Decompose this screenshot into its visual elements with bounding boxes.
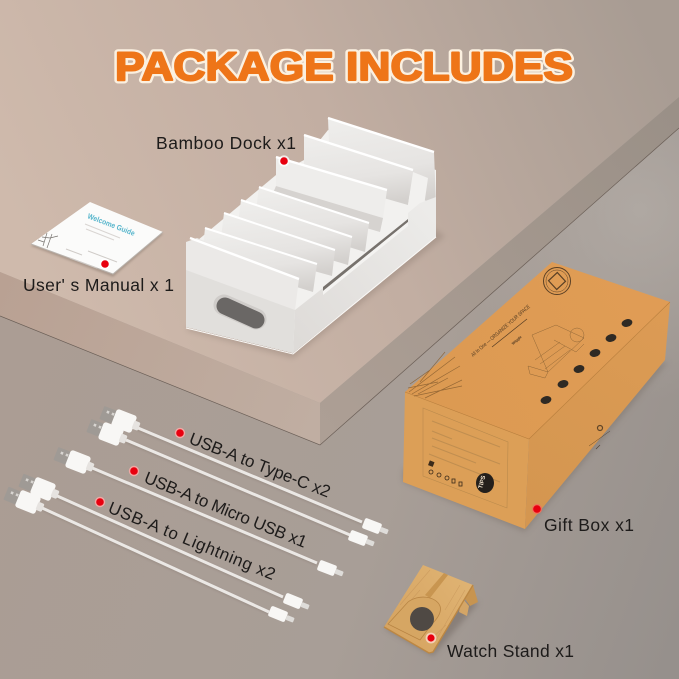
box dock line drawing [528,325,584,378]
box tips badge [476,473,494,493]
box slogan: All In One — ORGANIZE YOUR SPACE [470,304,532,359]
box slogan [470,304,532,359]
USB-A to Type-C cable 2 [86,417,376,549]
box feature icons [540,318,633,405]
stand recess [388,597,441,640]
manual heading: Welcome Guide [86,211,136,238]
markers: red dots [95,155,542,643]
USB-A to Micro USB cable [53,445,345,579]
box side brand mark [589,426,610,449]
title: PACKAGE INCLUDES [115,45,573,89]
panel: platform [0,0,679,445]
dock slat 7 [304,135,413,205]
dock side wall [293,197,436,353]
manual bamboo sketch [38,233,58,248]
dock slat 5 [255,187,369,252]
dock slat 2 [202,228,317,292]
panel: bamboo dock [186,118,445,358]
stand channel [425,573,448,598]
label: gift box: Gift Box x1 [544,515,634,535]
box top face [405,262,670,439]
stand grain [392,570,465,640]
label: watch stand: Watch Stand x1 [447,641,574,661]
dock rear slat [328,118,436,204]
manual footer text [66,249,117,268]
box front face [403,392,529,529]
panel: gift box [403,262,670,532]
label: user's manual: User' s Manual x 1 [23,275,174,295]
dock base [186,130,436,353]
USB-A to Type-C cable 1 [99,404,390,537]
dock slat 6 [276,157,387,218]
USB-A to Lightning cable 1 [18,472,311,612]
label: bamboo dock: Bamboo Dock x1 [156,133,296,153]
title: PACKAGE INCLUDES [115,45,573,89]
panel: user's manual [31,202,163,277]
box logo [544,268,570,294]
box slogan: Wiggle [511,335,523,346]
USB-A to Lightning cable 2 [3,485,296,625]
dock front panel [186,238,299,353]
box bamboo artwork [408,352,462,398]
box tips badge: TIPS [478,475,487,490]
dock slat 4 [237,200,352,265]
stand hole [410,607,434,631]
dock cable hole [224,305,256,320]
dock slat 3 [220,213,335,276]
panel: watch stand [384,565,479,656]
cable shadows [40,429,362,613]
manual subtext lines [85,224,120,240]
box side face [525,302,670,529]
box info panel [423,408,508,508]
label: USB-A to Type-C: USB-A to Type-C x2 [187,429,333,501]
stand legs [463,585,478,606]
label: USB-A to Micro USB: USB-A to Micro USB x1 [141,468,310,552]
label: USB-A to Lightning: USB-A to Lightning x2 [105,498,278,584]
stand plate [384,565,473,653]
